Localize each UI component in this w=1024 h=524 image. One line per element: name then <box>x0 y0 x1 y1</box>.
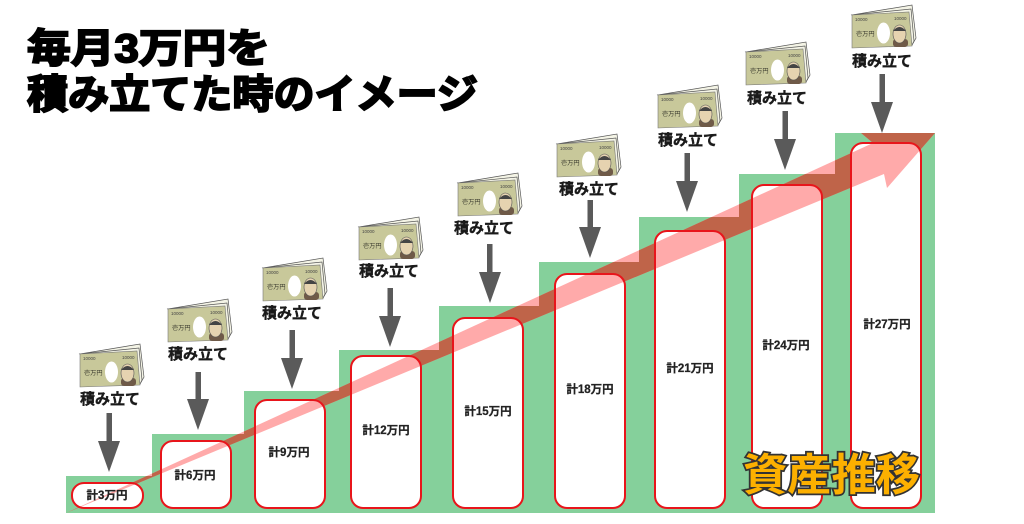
bar totals: 計12万円 <box>362 423 410 437</box>
icon: banknotes 5: 壱万円 <box>462 198 481 206</box>
icon: banknotes 5 <box>458 173 522 216</box>
icon: banknotes 7 <box>658 85 722 128</box>
bar totals: 計15万円 <box>464 404 512 418</box>
icon: banknotes 8 <box>746 42 810 85</box>
icon: banknotes 1: 10000 <box>122 355 135 360</box>
icon: banknotes 8: 10000 <box>749 54 762 59</box>
labels: 積み立て: 積み立て <box>658 131 718 149</box>
labels: 積み立て: 積み立て <box>454 219 514 237</box>
icon: banknotes 6: 壱万円 <box>561 159 580 167</box>
icon: banknotes 6: 10000 <box>560 146 573 151</box>
bar totals: 計21万円 <box>666 361 714 375</box>
labels: 積み立て: 積み立て <box>262 304 322 322</box>
labels: 積み立て: 積み立て <box>80 390 140 408</box>
icon: banknotes 1: 壱万円 <box>84 369 103 377</box>
icon: banknotes 7: 10000 <box>700 96 713 101</box>
staircase background: asset growth <box>66 133 935 513</box>
title: 積み立てた時のイメージ <box>27 73 478 117</box>
icon: banknotes 1: 10000 <box>83 356 96 361</box>
icon: banknotes 9: 壱万円 <box>856 30 875 38</box>
icon: banknotes 2: 10000 <box>171 311 184 316</box>
icon: banknotes 8: 壱万円 <box>750 67 769 75</box>
icon: banknotes 2: 壱万円 <box>172 324 191 332</box>
icon: banknotes 5: 10000 <box>461 185 474 190</box>
bar totals: 計24万円 <box>762 338 810 352</box>
bar totals: 計9万円 <box>269 445 309 459</box>
icon: banknotes 1 <box>80 344 144 387</box>
icon: banknotes 7: 壱万円 <box>662 110 681 118</box>
icon: banknotes 4: 壱万円 <box>363 242 382 250</box>
icon: banknotes 4: 10000 <box>401 228 414 233</box>
icon: banknotes 2: 10000 <box>210 310 223 315</box>
icon: banknotes 4 <box>359 217 423 260</box>
labels: 積み立て: 積み立て <box>359 262 419 280</box>
bar totals: 計18万円 <box>566 382 614 396</box>
labels: 積み立て <box>80 52 912 408</box>
icon: banknotes 9 <box>852 5 916 48</box>
icon: banknotes 3: 壱万円 <box>267 283 286 291</box>
icon: banknotes 2 <box>168 299 232 342</box>
icon: banknotes 7: 10000 <box>661 97 674 102</box>
labels: 積み立て: 積み立て <box>852 52 912 70</box>
bar totals: 計6万円 <box>175 468 215 482</box>
bar totals: 計27万円 <box>863 317 911 331</box>
labels: 積み立て: 積み立て <box>747 89 807 107</box>
down arrows <box>98 74 893 472</box>
icon: banknotes 4: 10000 <box>362 229 375 234</box>
icon: banknotes 9: 10000 <box>855 17 868 22</box>
icon: banknotes 6 <box>557 134 621 177</box>
white bar fills <box>72 143 921 508</box>
icon: banknotes 8: 10000 <box>788 53 801 58</box>
bar totals: 計3万円 <box>87 488 127 502</box>
labels: 積み立て: 積み立て <box>559 180 619 198</box>
labels: 積み立て: 積み立て <box>168 345 228 363</box>
title <box>27 27 478 117</box>
bar totals <box>87 317 911 502</box>
title: 毎月3万円を <box>27 27 270 71</box>
icon: banknotes 3: 10000 <box>305 269 318 274</box>
icon: banknotes 6: 10000 <box>599 145 612 150</box>
caption: 資産推移: 資産推移 <box>743 451 920 500</box>
icon: banknotes 3 <box>263 258 327 301</box>
growth arrow <box>66 133 935 513</box>
icon: banknotes 3: 10000 <box>266 270 279 275</box>
red bar outlines <box>72 143 921 508</box>
icon: banknotes 5: 10000 <box>500 184 513 189</box>
icon: banknotes 9: 10000 <box>894 16 907 21</box>
